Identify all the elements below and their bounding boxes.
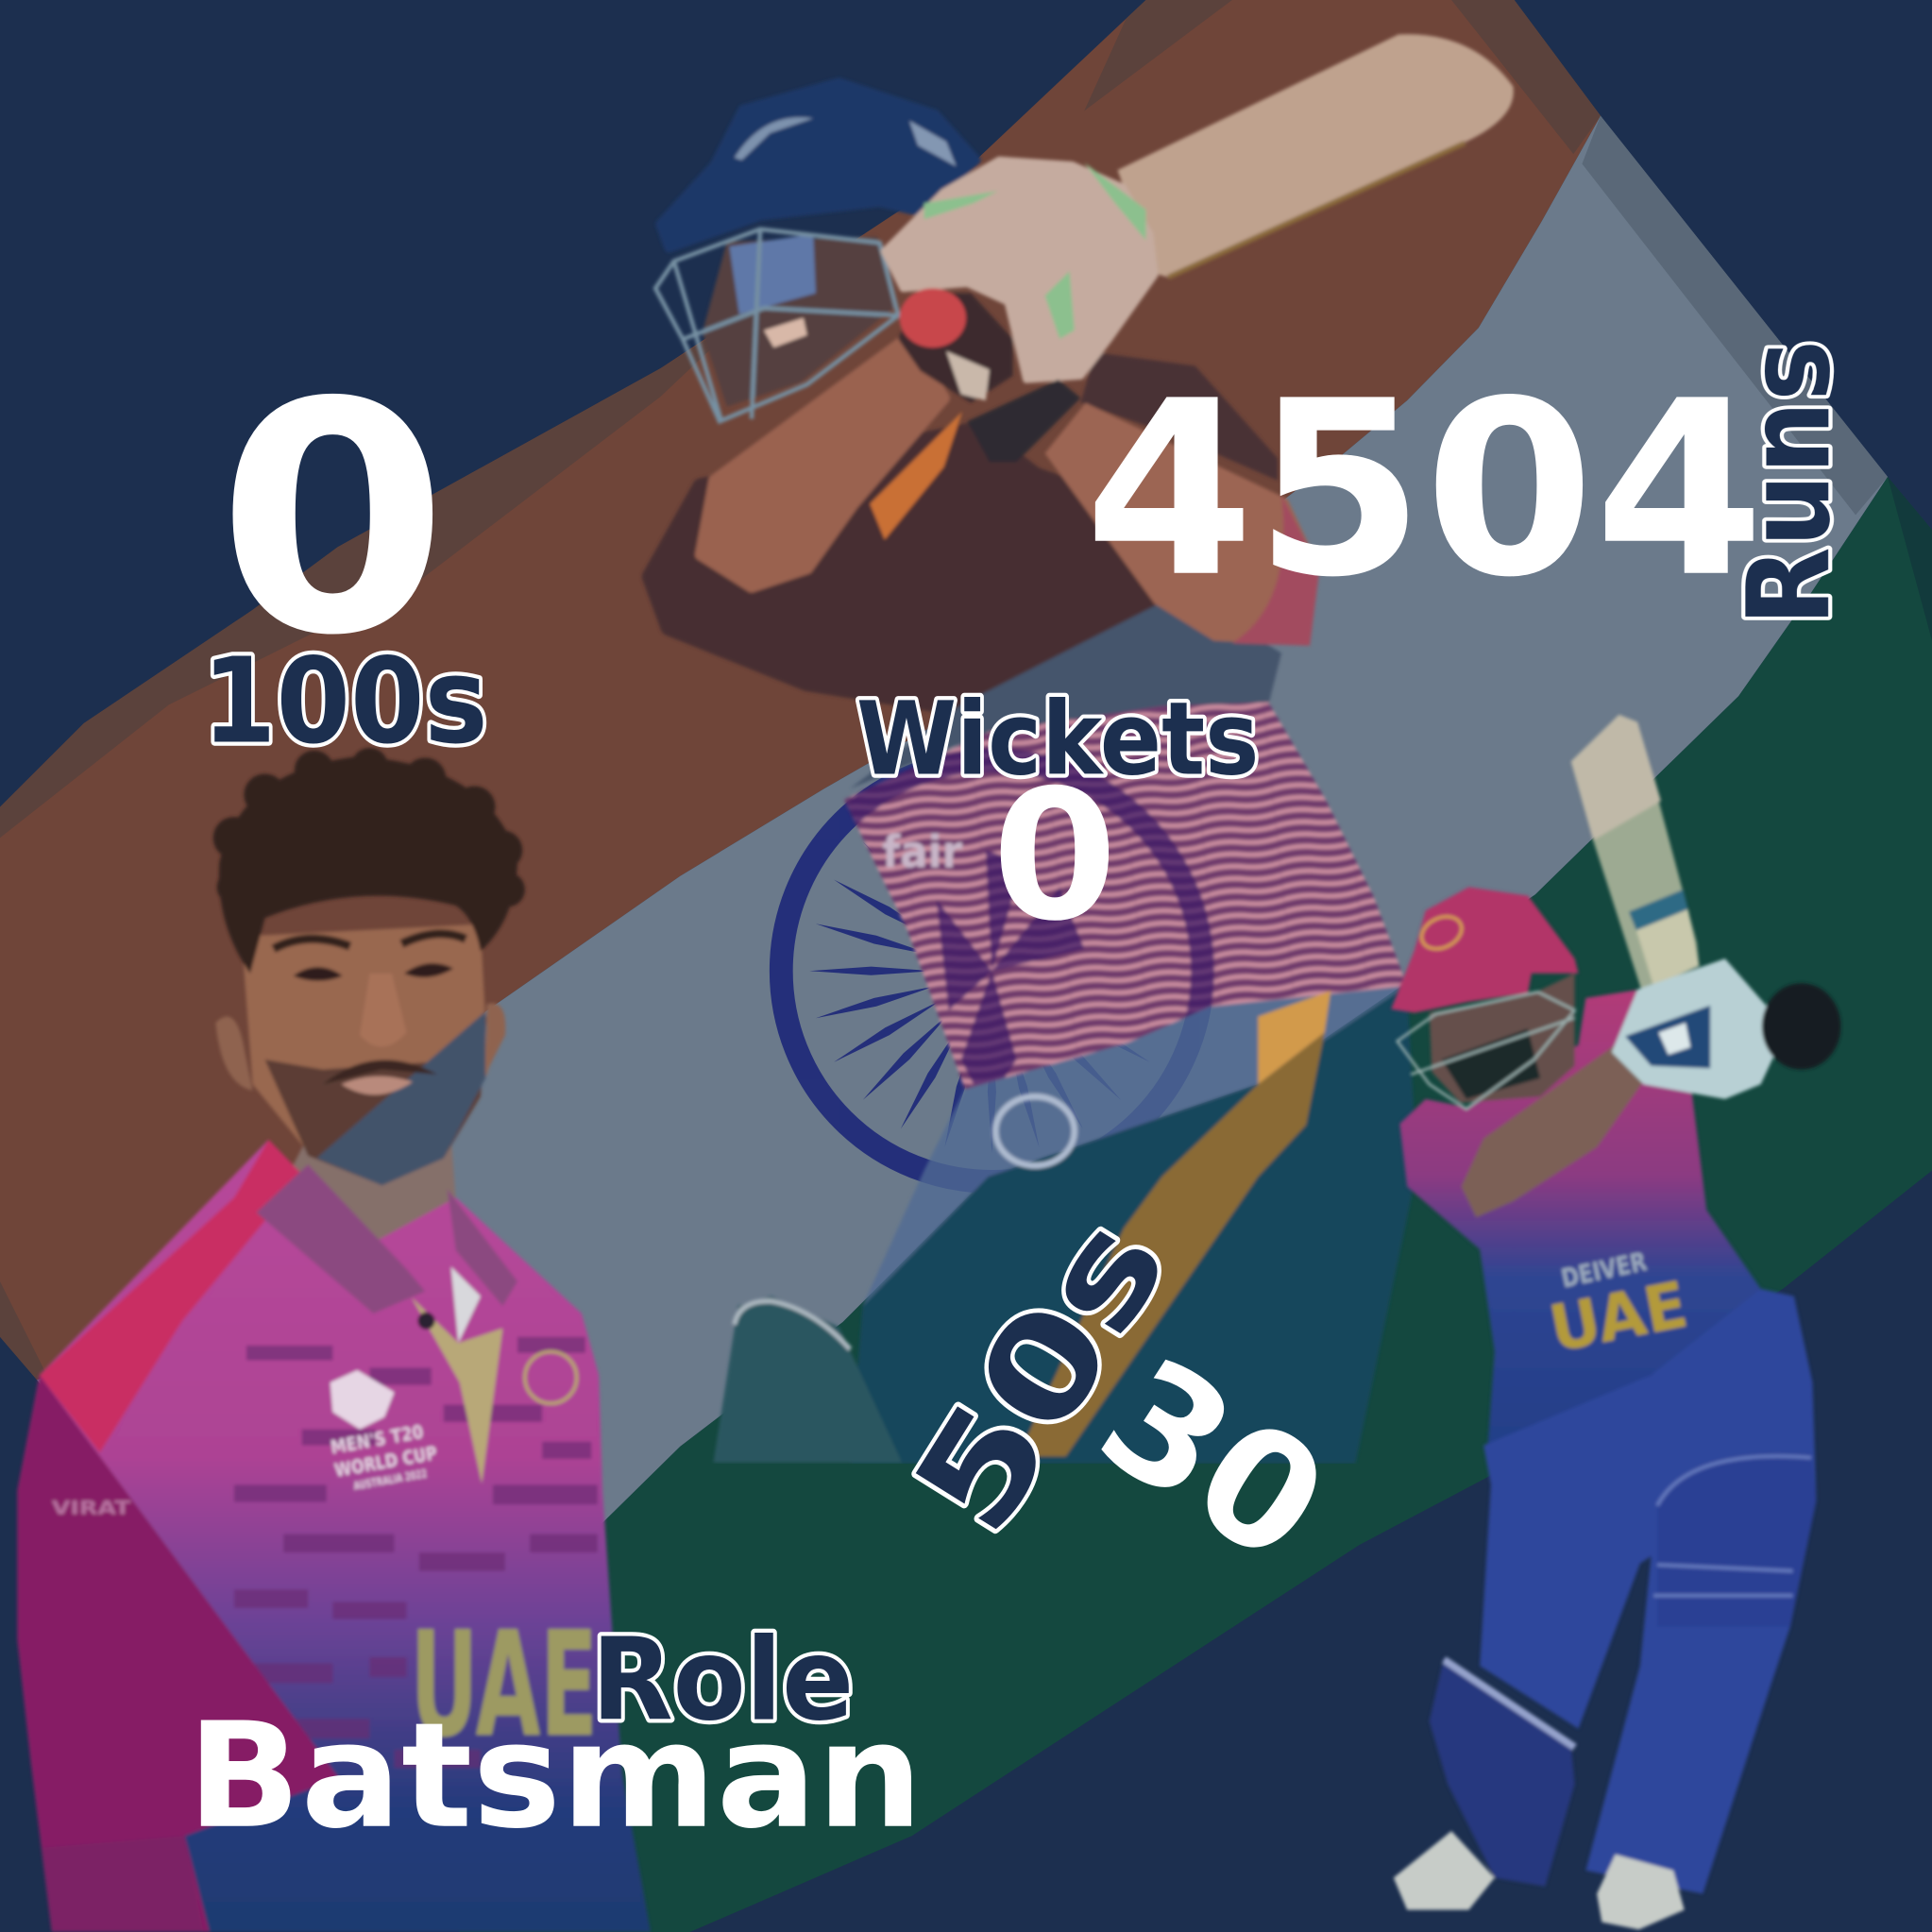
sweatband xyxy=(1232,496,1319,646)
face xyxy=(242,924,488,1183)
button xyxy=(417,1313,435,1330)
label: Wickets xyxy=(856,681,1260,798)
back sleeve xyxy=(1080,352,1278,481)
face shadow xyxy=(703,237,893,407)
label: 50s xyxy=(884,1190,1199,1561)
beard over white band xyxy=(316,1011,485,1185)
saffron band xyxy=(0,0,1601,1380)
UAE lettering: UAE xyxy=(411,1601,598,1770)
helmet xyxy=(660,82,975,247)
photo: left player xyxy=(0,748,690,1932)
event logo xyxy=(995,1096,1075,1165)
front pad edge xyxy=(1444,1660,1575,1747)
glove patch xyxy=(1658,1023,1690,1055)
UAE mark: UAE xyxy=(1544,1268,1693,1367)
photo: centre batter xyxy=(651,34,1514,1464)
event logo xyxy=(330,1370,395,1430)
shirt xyxy=(844,701,1407,1089)
green band edge xyxy=(1888,477,1932,641)
label: Role xyxy=(591,1615,854,1746)
brick pattern xyxy=(222,1337,598,1768)
placket xyxy=(412,1297,502,1483)
sponsor mark: fair xyxy=(882,827,963,879)
torso colour xyxy=(0,1109,690,1932)
crest xyxy=(525,1351,577,1403)
bat lower xyxy=(1636,909,1699,986)
stat: wickets xyxy=(856,681,1260,960)
collar xyxy=(256,1164,425,1313)
palm xyxy=(898,294,1013,403)
lower body over white band xyxy=(862,986,1407,1306)
arm xyxy=(1462,1045,1648,1217)
beard xyxy=(265,1016,486,1185)
helmet logo xyxy=(909,121,957,166)
grille xyxy=(655,229,898,421)
pad xyxy=(714,1296,902,1463)
neck xyxy=(265,1084,486,1313)
wrist band xyxy=(967,380,1080,462)
helmet crest xyxy=(735,117,813,161)
value: Batsman xyxy=(187,1692,923,1861)
beard xyxy=(1442,1029,1540,1099)
helmet crest xyxy=(1416,910,1466,955)
lips xyxy=(341,1076,413,1094)
mouth xyxy=(764,318,807,347)
stat: hundreds xyxy=(202,336,488,771)
value: 0 xyxy=(992,751,1117,960)
helmet xyxy=(1391,887,1579,1013)
handle knob xyxy=(1762,983,1840,1070)
icon: ashoka chakra xyxy=(781,760,1203,1181)
stat: role xyxy=(187,1615,923,1861)
nose xyxy=(360,974,407,1046)
event text xyxy=(329,1419,441,1496)
value: 4504 xyxy=(1084,350,1765,631)
sleeve lower tone xyxy=(37,1836,203,1932)
green band xyxy=(296,477,1932,1932)
ears xyxy=(215,1004,505,1091)
glove green accents xyxy=(924,162,1146,339)
chakra showing through shirt xyxy=(844,748,1216,1088)
bat toe xyxy=(1571,715,1661,840)
sleeve mark: VIRAT xyxy=(52,1498,131,1519)
stat: fifties xyxy=(884,1190,1357,1600)
orange collar xyxy=(870,412,962,540)
value: 30 xyxy=(1069,1323,1357,1600)
collar right xyxy=(448,1189,517,1306)
photo: right batter xyxy=(1391,715,1840,1929)
glove accent xyxy=(1625,1006,1710,1068)
gold stripe highlight xyxy=(1258,991,1330,1084)
front pad xyxy=(1430,1657,1575,1887)
sleeve xyxy=(0,1375,339,1932)
face xyxy=(1430,974,1575,1103)
forehead xyxy=(729,234,816,314)
pad ridges xyxy=(1653,1456,1811,1596)
torso lower in white band xyxy=(850,591,1281,788)
eyes xyxy=(294,963,453,981)
jersey xyxy=(0,1109,690,1932)
gold stripe xyxy=(1018,1032,1325,1456)
lower body xyxy=(850,986,1417,1464)
label: 100s xyxy=(202,633,488,771)
bat xyxy=(1571,715,1699,990)
pad highlight xyxy=(735,1301,850,1349)
event text: AUSTRALIA 2022 xyxy=(353,1466,428,1493)
sponsor: DEIVER xyxy=(1559,1247,1650,1294)
hair xyxy=(213,748,525,974)
event text: WORLD CUP xyxy=(333,1442,439,1482)
thigh pad xyxy=(1657,1452,1816,1626)
white undershirt xyxy=(451,1266,481,1343)
value: 0 xyxy=(217,336,449,705)
mustache xyxy=(323,1059,437,1084)
saffron brush streaks xyxy=(0,0,1601,1380)
bat edge xyxy=(1168,143,1465,278)
torso xyxy=(1399,990,1761,1454)
stat: runs xyxy=(1084,340,1856,631)
red tint on shoulder xyxy=(40,1140,316,1452)
handle xyxy=(900,288,966,347)
front arm xyxy=(701,339,944,586)
event text: MEN'S T20 xyxy=(329,1421,425,1458)
bat band xyxy=(1629,890,1688,930)
back arm xyxy=(1045,403,1319,646)
handle loop xyxy=(946,351,990,400)
bat xyxy=(1117,34,1514,278)
grille xyxy=(1398,991,1575,1109)
white band edge xyxy=(1582,116,1888,515)
gloves xyxy=(1612,958,1787,1099)
trousers xyxy=(1480,1289,1816,1894)
white band xyxy=(37,116,1888,1725)
brows xyxy=(274,934,466,949)
label: Runs xyxy=(1724,340,1856,626)
glove xyxy=(885,161,1155,380)
torso xyxy=(651,430,1159,704)
shoes xyxy=(1394,1831,1685,1929)
